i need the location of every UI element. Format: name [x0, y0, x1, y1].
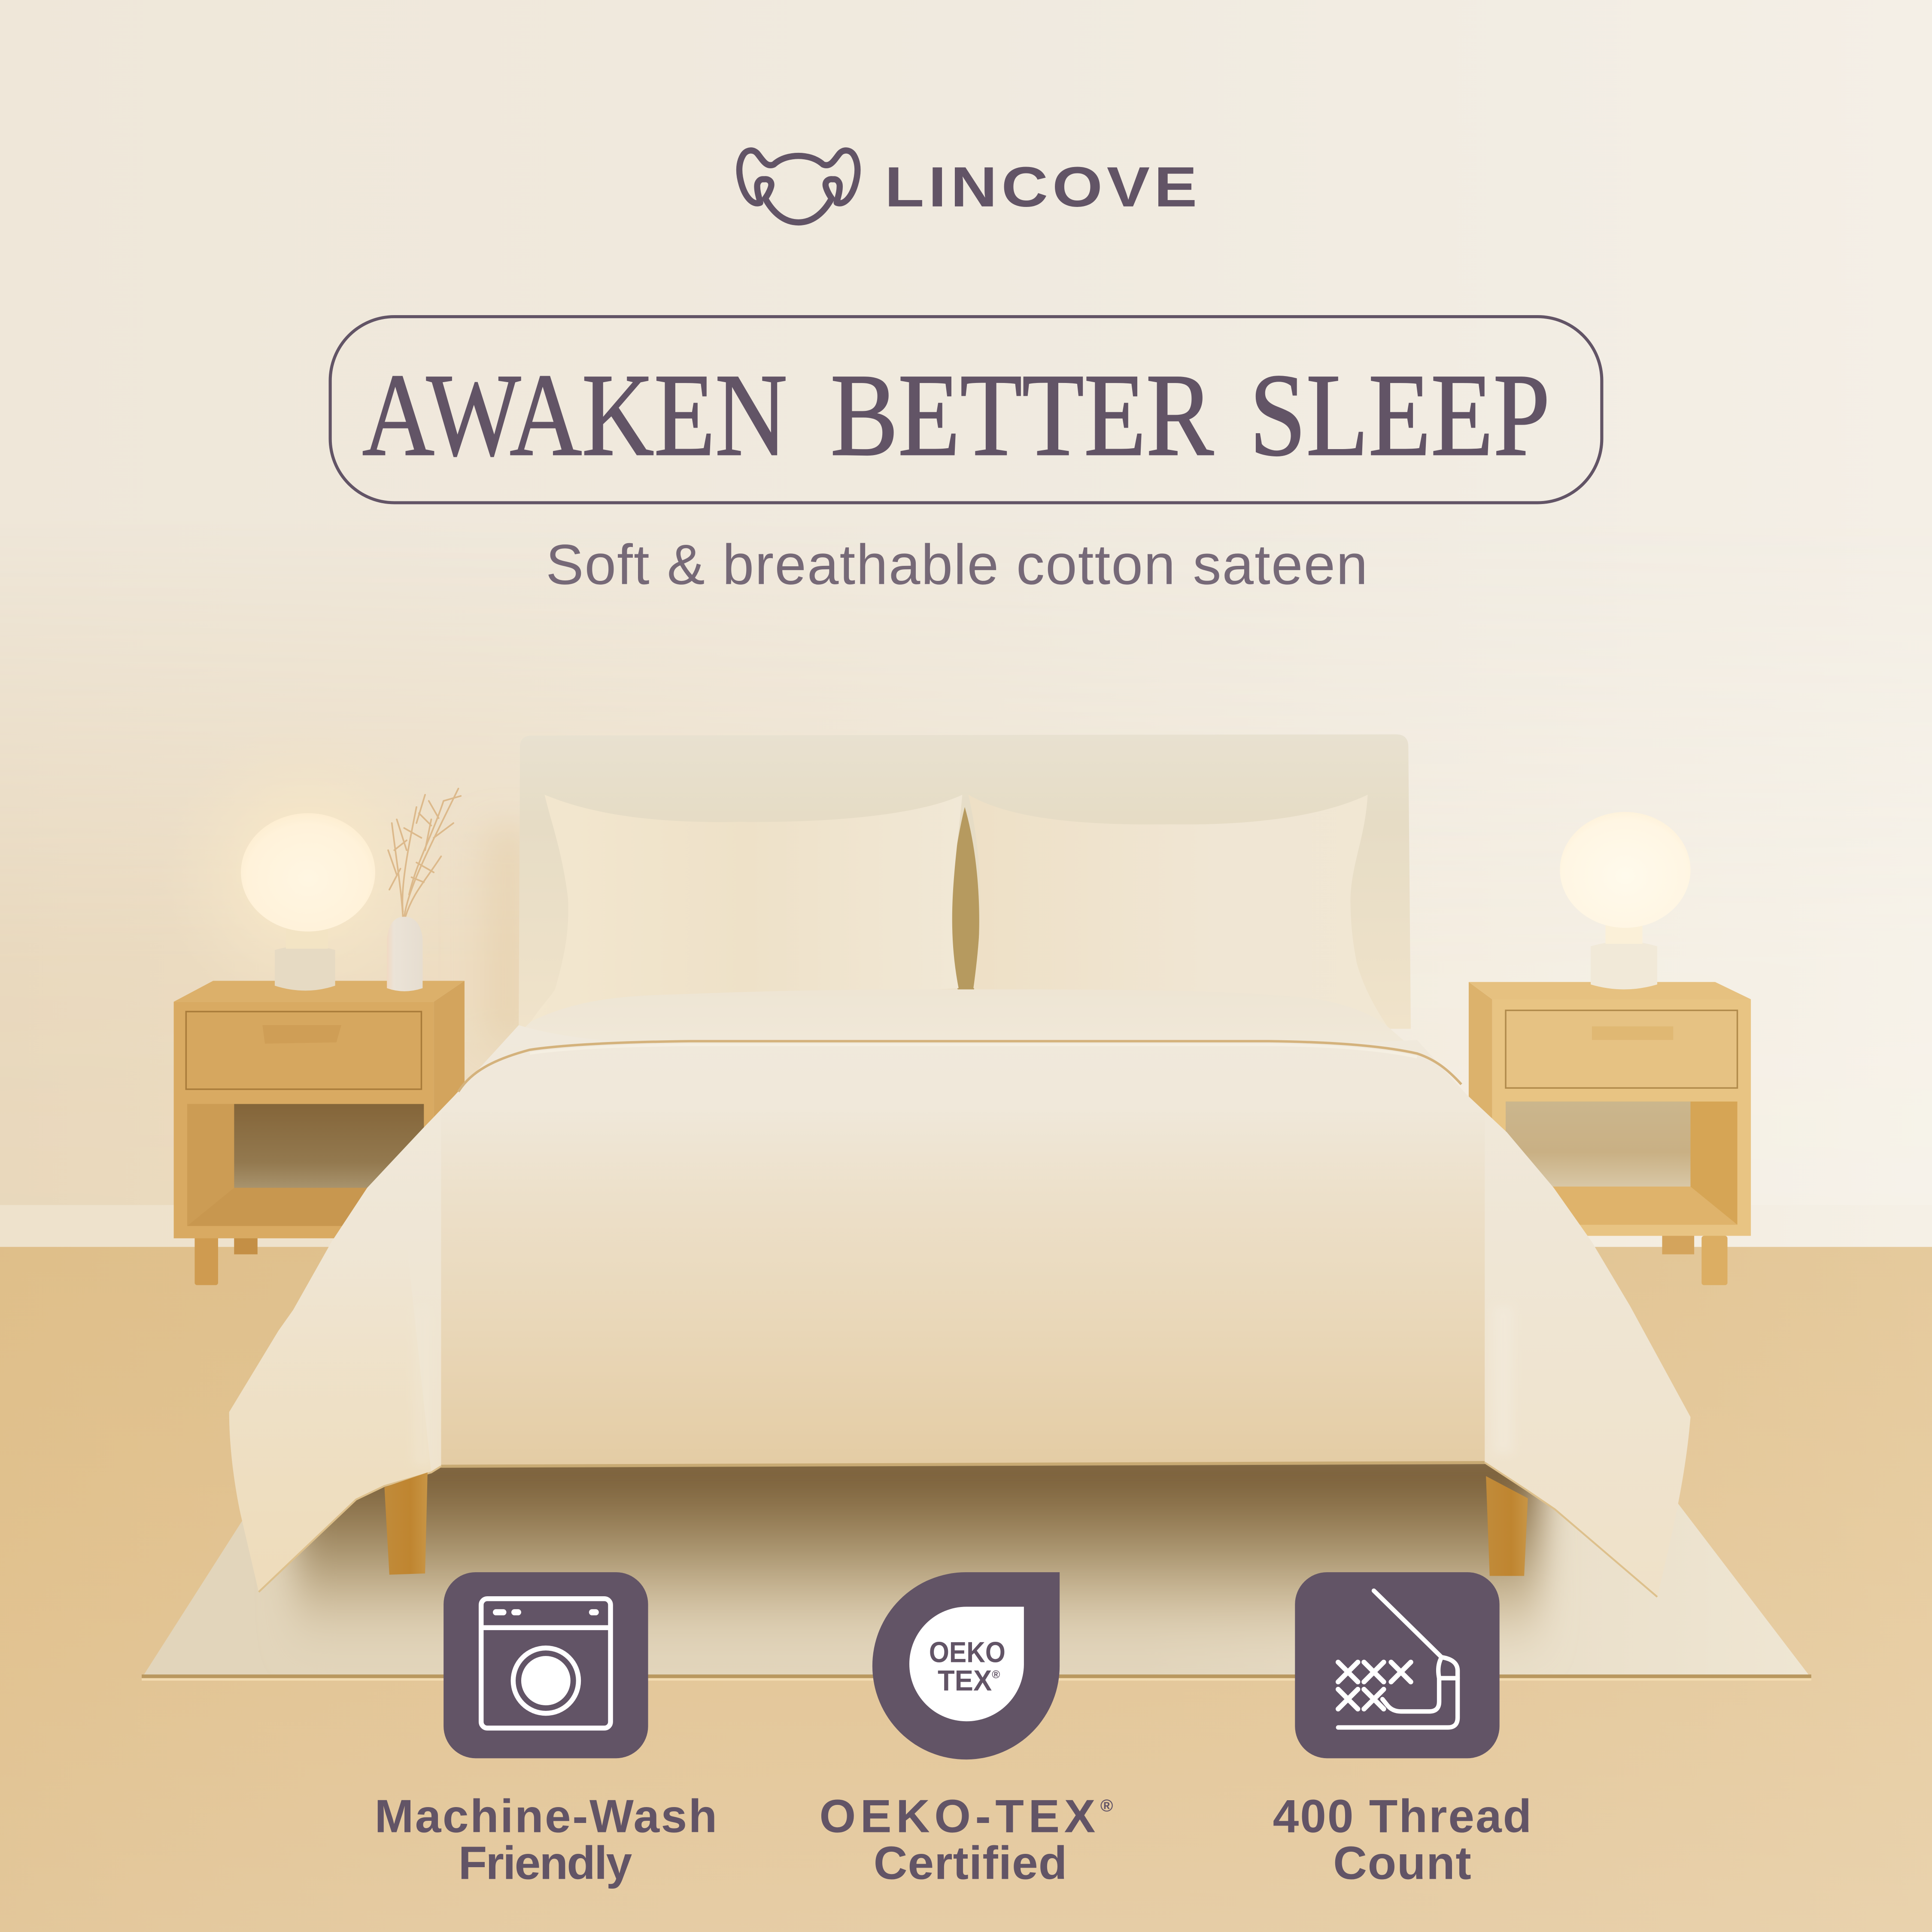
drawer	[186, 1012, 422, 1089]
pillow left	[531, 795, 962, 1021]
handle	[1592, 1027, 1673, 1040]
icon: oeko-tex leaf: TEX	[938, 1665, 992, 1697]
title: AWAKEN	[362, 349, 787, 480]
bed	[229, 734, 1691, 1597]
sheet hem line	[459, 1041, 1461, 1092]
wall	[0, 0, 1932, 1251]
lamp left	[241, 813, 375, 990]
floor	[0, 1247, 1932, 1932]
top sheet fold	[455, 990, 1461, 1095]
bed leg right	[1486, 1476, 1528, 1576]
feature: thread count	[1273, 1572, 1531, 1889]
title box	[330, 317, 1602, 503]
label: Count	[1333, 1837, 1471, 1889]
lamp globe	[241, 813, 375, 932]
fold highlight left	[413, 1306, 432, 1466]
icon: needle and stitches	[1295, 1572, 1500, 1758]
pillow right	[969, 795, 1388, 1027]
label	[1273, 1790, 1531, 1889]
headboard	[519, 734, 1411, 1029]
icon: oeko-tex leaf: OEKO	[929, 1636, 1005, 1668]
gap between pillows	[951, 807, 979, 993]
lamp right	[1560, 812, 1691, 990]
label: ®	[1100, 1796, 1113, 1815]
opening	[1506, 1102, 1738, 1225]
wordmark: LINCOVE	[885, 155, 1201, 219]
duvet silhouette	[229, 1025, 1691, 1597]
icon: elephant head	[739, 150, 857, 222]
rug with under-bed shadow	[142, 1442, 1811, 1681]
fold highlight right	[1493, 1306, 1513, 1454]
legs	[1662, 1236, 1694, 1255]
label: 400 Thread	[1273, 1790, 1531, 1843]
opening	[187, 1104, 424, 1226]
left flap tint	[229, 1242, 431, 1592]
icon: oeko-tex leaf	[872, 1572, 1060, 1759]
feature: machine wash	[374, 1572, 717, 1889]
drawer	[1506, 1010, 1738, 1088]
logo	[739, 150, 1201, 222]
icon: oeko-tex leaf: ®	[992, 1669, 1000, 1681]
side and top	[1469, 982, 1492, 1140]
front frame	[174, 1002, 434, 1238]
label: Certified	[874, 1837, 1067, 1889]
lamp base	[1591, 942, 1657, 990]
subtitle: Soft & breathable cotton sateen	[546, 532, 1368, 596]
label: OEKO-TEX	[819, 1790, 1095, 1843]
label	[819, 1790, 1113, 1889]
lamp base	[275, 946, 335, 990]
lamp globe	[1560, 812, 1691, 928]
warm wall shading	[0, 646, 822, 1205]
nightstand left	[174, 981, 465, 1285]
label	[374, 1790, 717, 1889]
bed leg left	[384, 1473, 428, 1575]
label: Machine-Wash	[374, 1790, 717, 1843]
lamp glow left	[160, 725, 456, 1020]
title	[362, 349, 1550, 480]
side and top	[434, 981, 465, 1140]
front frame	[1492, 999, 1751, 1236]
icon: washing machine	[444, 1572, 648, 1758]
baseboard	[0, 1205, 1932, 1247]
headboard wall shadow	[468, 826, 525, 1047]
label: Friendly	[459, 1837, 632, 1889]
duvet bottom hem	[441, 1463, 1485, 1466]
feature: oeko-tex	[819, 1572, 1113, 1889]
nightstand right	[1469, 982, 1751, 1285]
title: BETTER	[830, 349, 1214, 480]
legs	[234, 1236, 258, 1255]
title: SLEEP	[1249, 349, 1550, 480]
vase	[387, 917, 422, 991]
handle	[262, 1025, 341, 1044]
duvet front panel shade	[441, 1109, 1485, 1466]
dried branches	[388, 789, 461, 917]
